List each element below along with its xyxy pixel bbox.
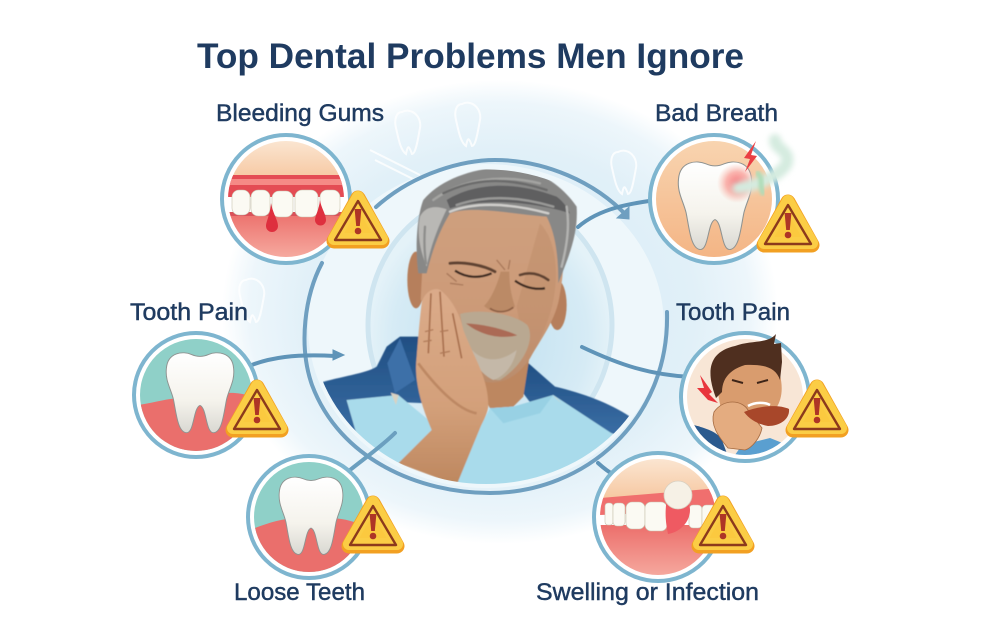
man with toothache: [318, 167, 630, 488]
hand: [398, 289, 488, 485]
pain bolt: [697, 375, 718, 403]
heading: swelling or infection: Swelling or Infection: [536, 579, 759, 606]
panel: bad breath: [650, 135, 787, 263]
bib: [347, 395, 437, 465]
hand: [713, 402, 762, 450]
main ring arcs and arrows: [240, 160, 692, 493]
neck: [484, 360, 530, 409]
neck and face: [718, 364, 782, 424]
icon: warning, loose teeth: [349, 502, 397, 546]
brows and eyes: [450, 263, 495, 272]
heading: loose teeth: Loose Teeth: [234, 579, 365, 606]
denim shirt: [323, 336, 422, 432]
lightning: [744, 141, 757, 172]
icon: warning, bad breath: [764, 201, 812, 245]
teeth: [232, 190, 340, 217]
faint tooth pattern: [239, 103, 638, 344]
arrow: loose teeth: [350, 433, 395, 470]
arc: left and bottom: [305, 263, 667, 493]
central portrait ring: [308, 164, 664, 488]
face: [421, 207, 563, 382]
hair: [417, 167, 577, 283]
arrow: swelling: [598, 463, 632, 483]
panel: left tooth pain: [134, 333, 258, 457]
arrow: right tooth pain: [582, 347, 692, 377]
teeth: [605, 502, 716, 531]
blood drops: [266, 203, 278, 232]
title: Top Dental Problems Men Ignore: [197, 37, 744, 76]
chicken leg: [744, 406, 789, 426]
heading: bleeding gums: Bleeding Gums: [216, 100, 384, 127]
icon: warning, right tooth pain: [793, 386, 841, 430]
arrow: bad breath: [578, 198, 671, 227]
arc: top with arrow: [376, 160, 629, 219]
icon: warning, bleeding gums: [334, 197, 382, 241]
collar pins: [391, 393, 562, 405]
panel: right tooth pain (man eating): [681, 333, 809, 470]
mouth: [466, 323, 517, 337]
squinting eyes and teeth: [732, 380, 768, 383]
shirt: [694, 425, 726, 452]
icon: warning, left tooth pain: [233, 386, 281, 430]
ears: [407, 252, 425, 308]
beard: [460, 312, 530, 380]
panel: swelling or infection: [594, 453, 722, 581]
panel: loose teeth: [248, 456, 370, 580]
green breath: [738, 140, 787, 188]
arrow: left tooth pain: [240, 350, 344, 370]
heading: bad breath: Bad Breath: [655, 100, 778, 127]
swelling: [666, 504, 690, 534]
heading: right tooth pain: Tooth Pain: [676, 299, 790, 326]
hair: [710, 334, 782, 398]
icon: warning, swelling: [699, 502, 747, 546]
panel: bleeding gums: [222, 135, 350, 263]
heading: left tooth pain: Tooth Pain: [130, 299, 248, 326]
background watercolor blob: [222, 80, 778, 544]
